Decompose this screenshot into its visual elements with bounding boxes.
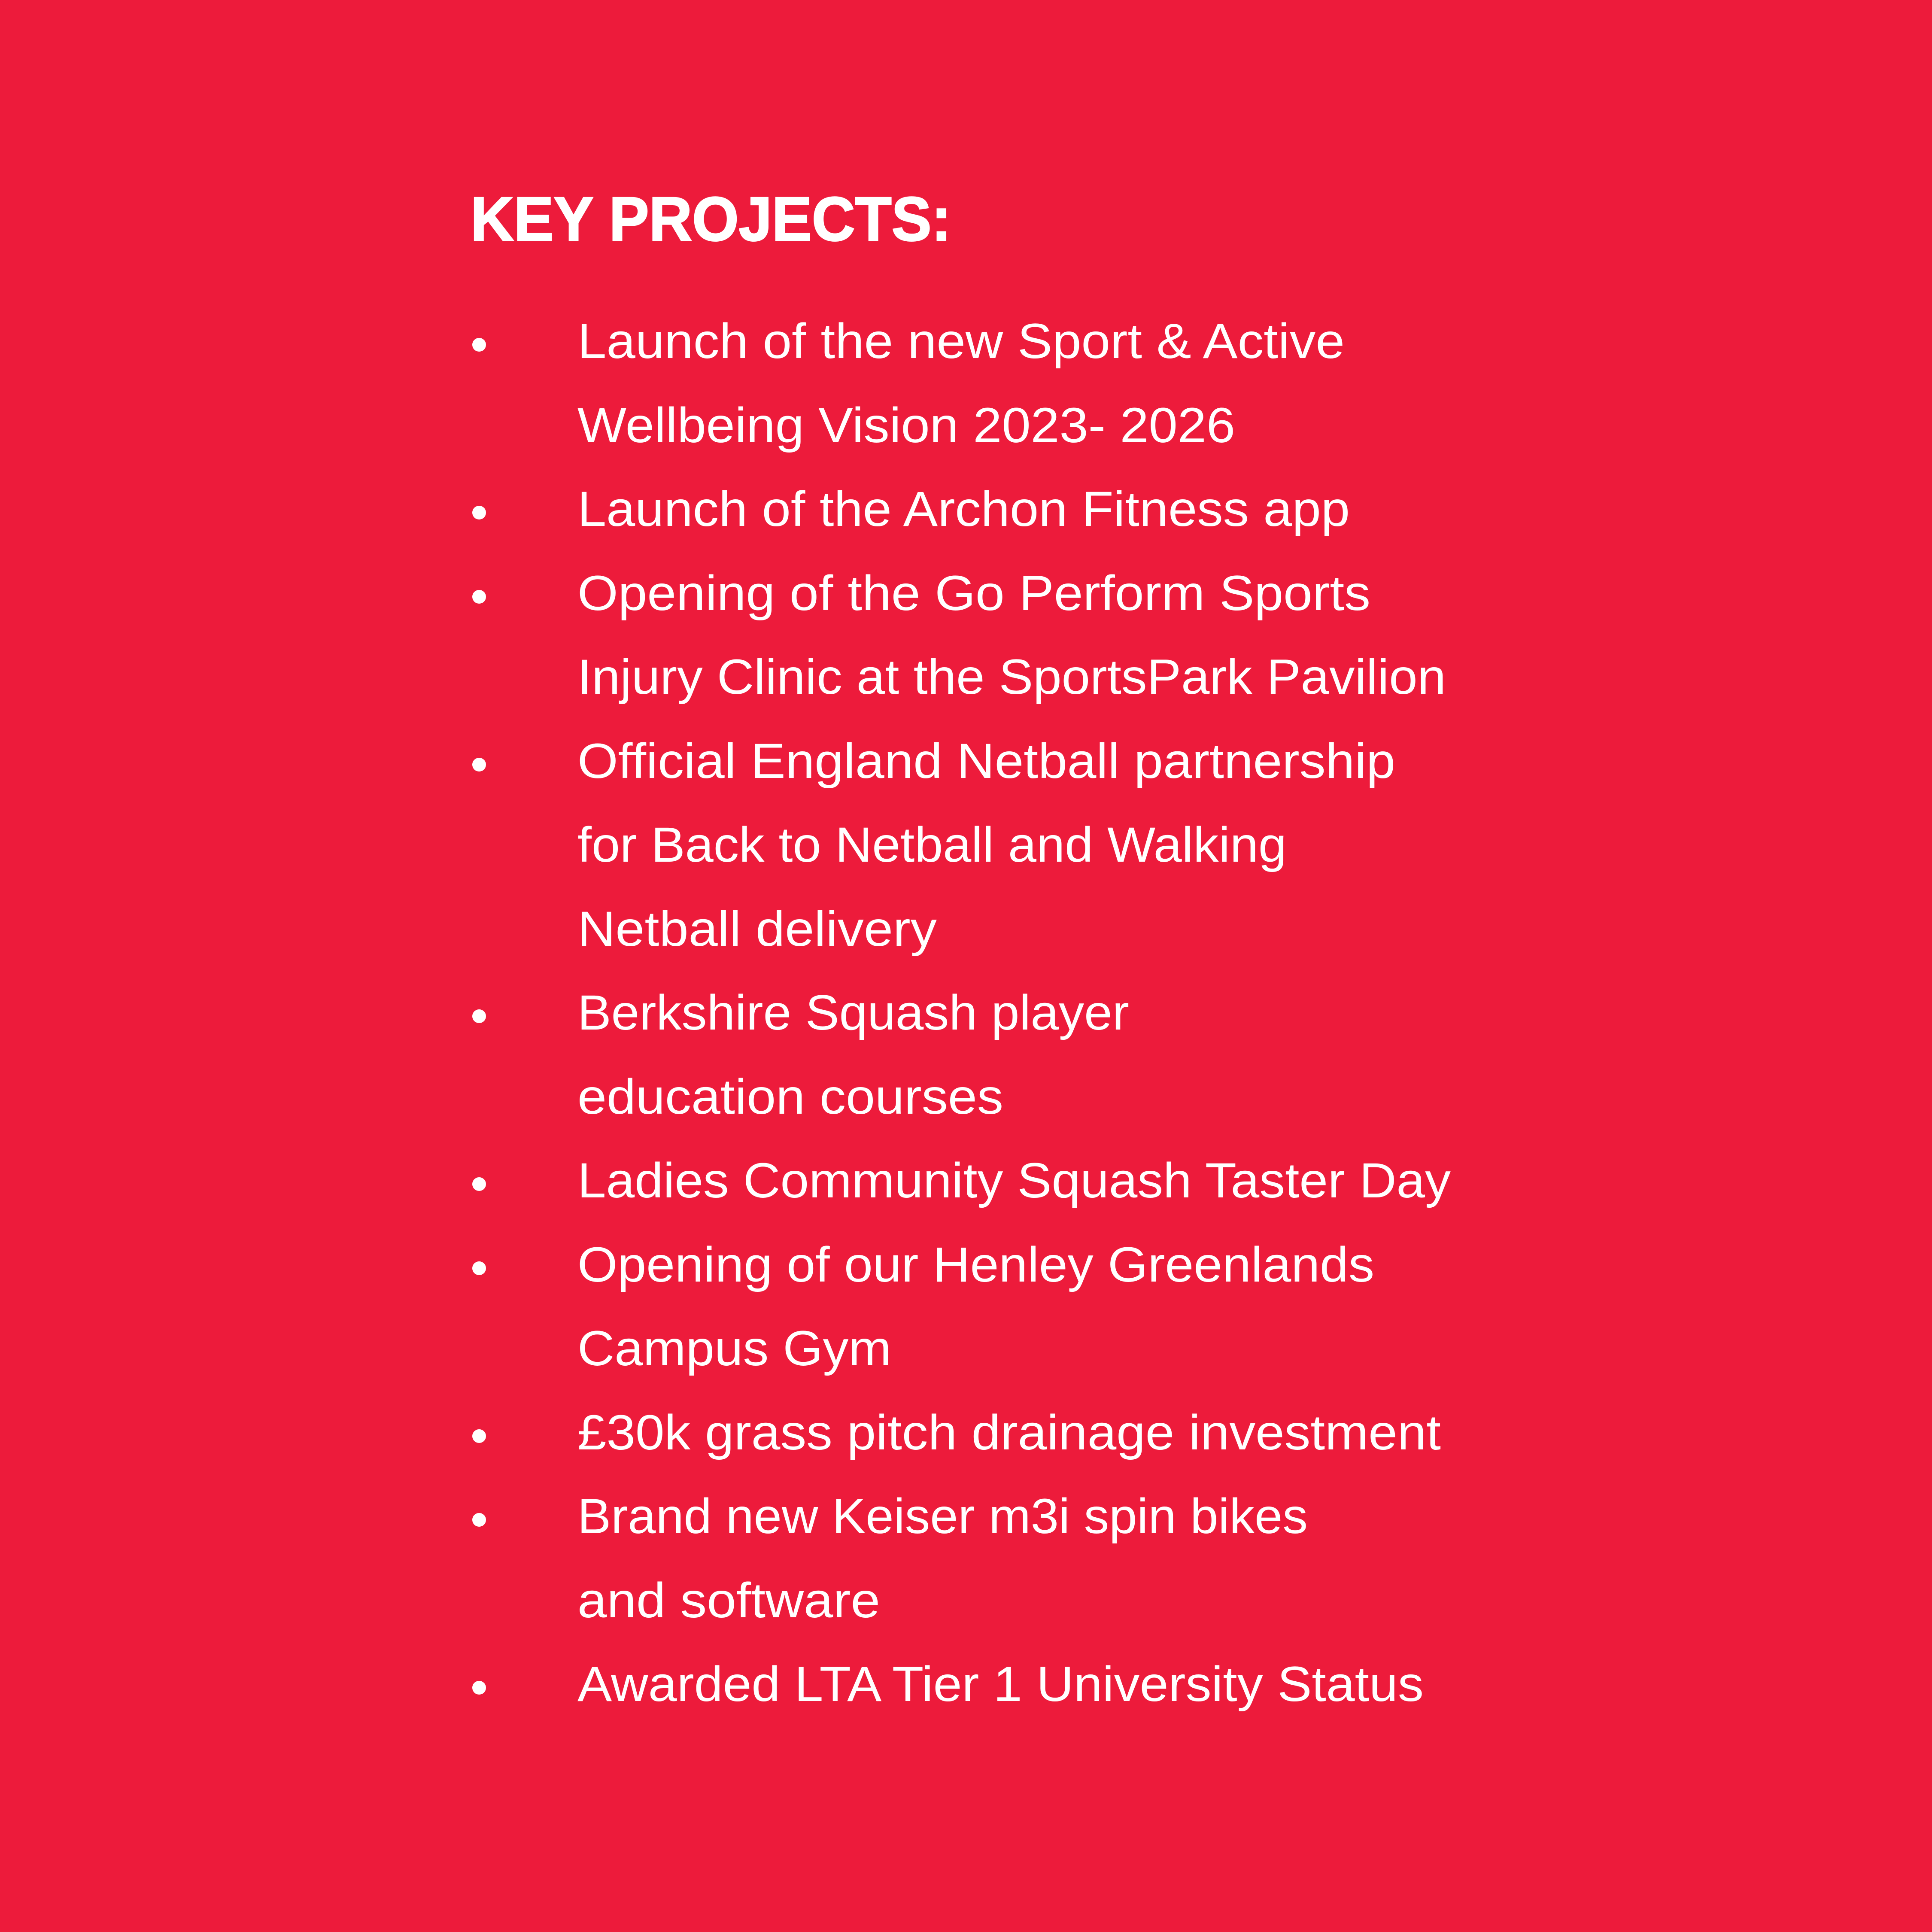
list item: fitness app: Launch of the Archon Fitness app	[577, 482, 1350, 537]
list item: lta status: Awarded LTA Tier 1 University Status	[577, 1657, 1424, 1712]
list item: henley gym	[472, 1237, 1374, 1376]
title: KEY PROJECTS:	[471, 184, 951, 254]
list item: spin bikes: and software	[577, 1573, 880, 1628]
list item: england netball	[472, 734, 1395, 957]
list item: henley gym: Opening of our Henley Greenlands	[577, 1237, 1374, 1292]
list item: england netball: for Back to Netball and Walking	[577, 817, 1287, 872]
list item: england netball: Netball delivery	[577, 902, 937, 957]
list item: sport vision: Launch of the new Sport & Active	[577, 314, 1345, 369]
list item: injury clinic: Injury Clinic at the SportsPark Pavilion	[577, 650, 1446, 705]
list item: squash education	[472, 985, 1129, 1124]
list item: sport vision	[472, 314, 1345, 453]
list item: england netball: Official England Netball partnership	[577, 734, 1395, 789]
list item: sport vision: Wellbeing Vision 2023- 2026	[577, 398, 1235, 453]
list item: injury clinic	[472, 566, 1446, 705]
list item: spin bikes	[472, 1489, 1308, 1628]
list item: squash education: Berkshire Squash player	[577, 985, 1129, 1040]
list item: henley gym: Campus Gym	[577, 1321, 891, 1376]
list item: pitch drainage: £30k grass pitch drainage investment	[577, 1405, 1441, 1460]
list item: injury clinic: Opening of the Go Perform Sports	[577, 566, 1370, 621]
list item: squash education: education courses	[577, 1069, 1003, 1124]
list item: squash taster day: Ladies Community Squash Taster Day	[577, 1153, 1451, 1208]
list item: spin bikes: Brand new Keiser m3i spin bikes	[577, 1489, 1308, 1544]
